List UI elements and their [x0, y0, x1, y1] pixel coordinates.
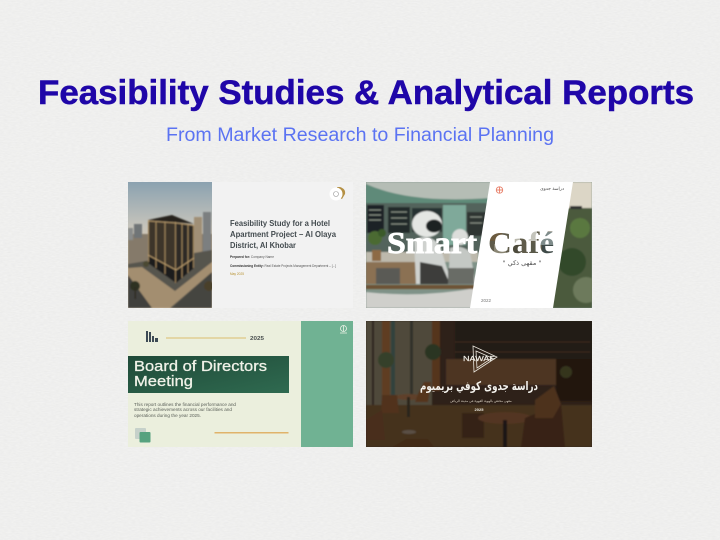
heading banner	[128, 356, 289, 393]
white slanted panel	[470, 182, 573, 308]
logo: NAWAF: NAWAF	[463, 354, 495, 363]
top rule	[166, 337, 246, 339]
description: This report outlines the financial performance and	[134, 402, 237, 407]
cover details: May 2025	[230, 272, 244, 276]
heading banner: Meeting	[134, 373, 193, 390]
image: robot café	[366, 182, 599, 308]
cover title: Smart Café	[387, 225, 554, 260]
arabic subtitle: مقهى مختص بالهوية القهوة في مدينة الرياض	[450, 399, 512, 403]
heading banner: Board of Directors	[134, 358, 267, 375]
panel: Smart Café cover	[366, 182, 599, 308]
year: 2025	[250, 336, 264, 342]
description: operations during the year 2025.	[134, 413, 201, 418]
image: dark café interior	[366, 321, 592, 447]
arabic title: دراسة جدوى كوفي بريميوم	[420, 379, 538, 394]
title: Feasibility Studies & Analytical Reports	[38, 74, 694, 112]
arabic label: دراسة جدوى	[540, 187, 564, 192]
cover details: Commissioning Entity: Real Estate Projects Management Department – [...]	[230, 264, 336, 268]
cover title: Apartment Project – Al Olaya	[230, 229, 336, 239]
cover details	[230, 255, 336, 276]
icon: logo	[496, 187, 503, 193]
cover title: Feasibility Study for a Hotel	[230, 218, 330, 228]
description: strategic achievements across our facilities and	[134, 407, 233, 412]
cover details: Prepared for: Company Name	[230, 255, 274, 259]
panel: hotel feasibility study cover	[128, 182, 353, 308]
cover title: District, Al Khobar	[230, 240, 297, 250]
green side band	[301, 321, 353, 447]
cover title: Smart Café: Café	[488, 225, 554, 260]
year: 2022	[481, 298, 492, 303]
panel: Board of Directors cover	[128, 321, 353, 447]
image: hotel building	[128, 182, 214, 308]
icon: chart logo	[146, 331, 158, 342]
panel: premium coffee study cover	[366, 321, 592, 447]
description	[134, 402, 237, 418]
subtitle: From Market Research to Financial Planning	[166, 125, 554, 146]
decorative squares	[135, 428, 150, 442]
logo	[330, 187, 345, 200]
bottom rule	[214, 432, 288, 434]
logo: NAWAF	[463, 346, 497, 372]
cover title: Smart Café: Smart	[387, 225, 478, 260]
year: 2025	[475, 407, 484, 412]
icon: side logo	[340, 326, 347, 333]
cover title	[230, 218, 336, 250]
arabic tagline: " مقهى ذكي "	[503, 259, 541, 267]
